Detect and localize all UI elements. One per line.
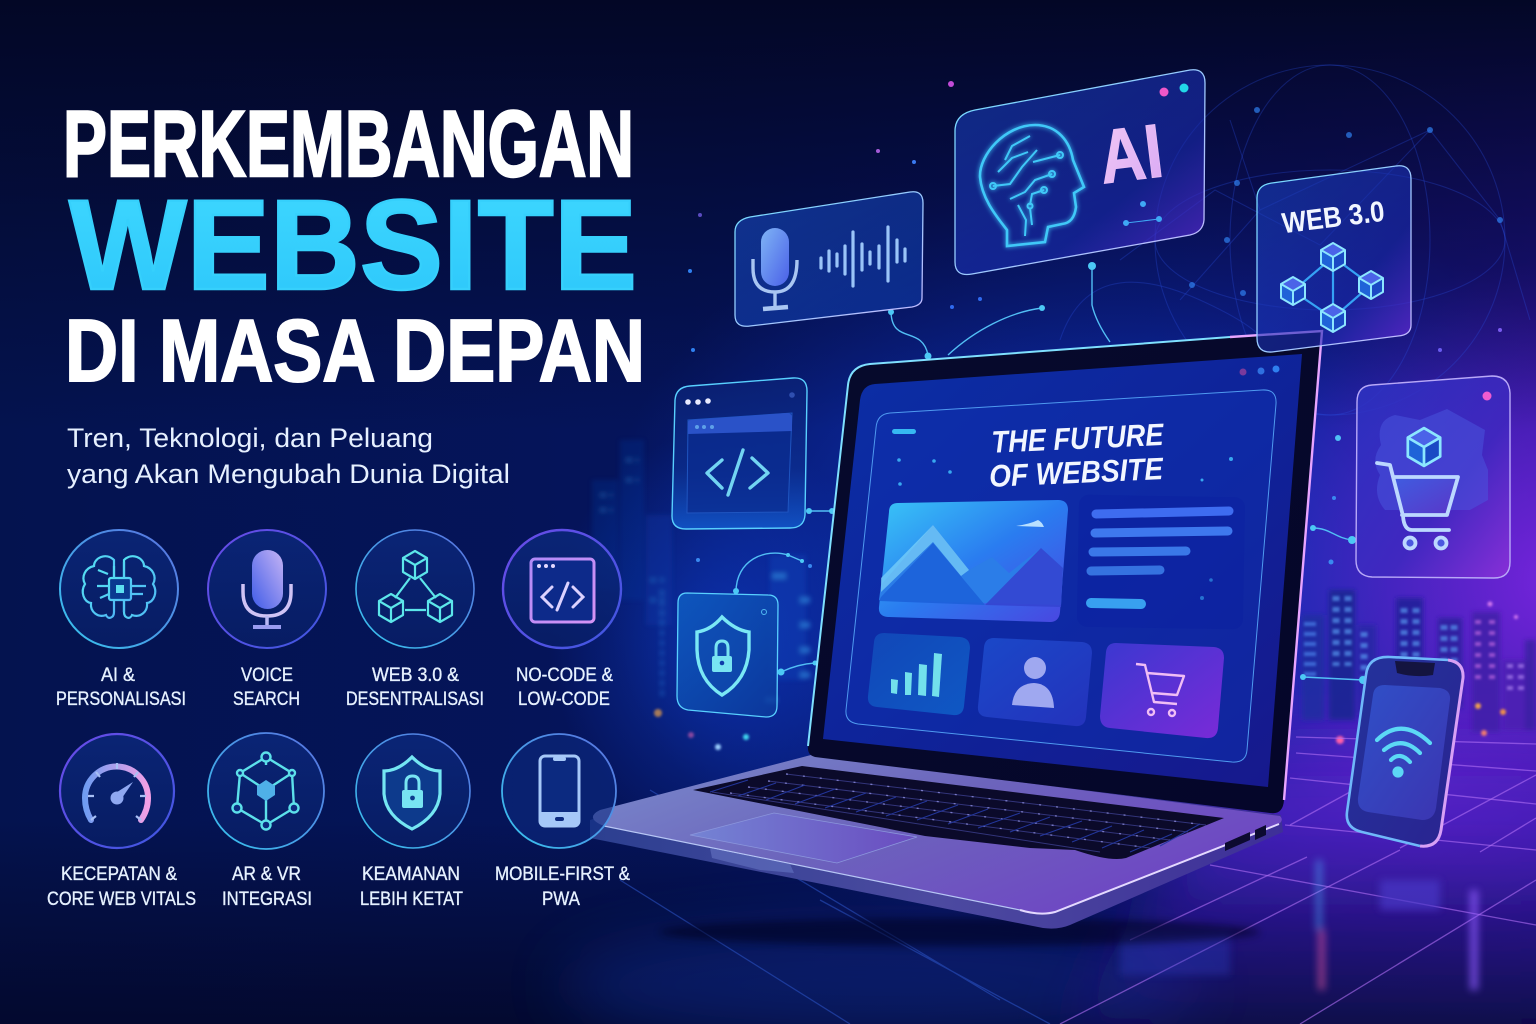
feature: speed bbox=[47, 734, 196, 910]
screen title: OF WEBSITE bbox=[988, 451, 1165, 494]
city lights left bbox=[654, 709, 749, 750]
feature: AR VR bbox=[208, 733, 324, 910]
subtitle: Tren, Teknologi, dan Peluang bbox=[67, 423, 433, 453]
label: VOICE bbox=[241, 665, 293, 686]
feature: mobile-first bbox=[495, 734, 630, 910]
trackpad bbox=[690, 813, 917, 863]
mini network bbox=[1124, 202, 1162, 226]
label: KECEPATAN & bbox=[61, 864, 177, 885]
city skyline right bbox=[1302, 590, 1536, 744]
label: WEB 3.0 & bbox=[372, 665, 459, 686]
title bbox=[63, 91, 645, 400]
feature: security: LEBIH KETAT bbox=[360, 889, 463, 910]
subtitle bbox=[67, 423, 510, 489]
icon: wifi bbox=[1377, 729, 1430, 776]
icon: wire cube bbox=[232, 752, 298, 830]
panel: web 3.0 bbox=[1257, 166, 1411, 352]
feature: no-code bbox=[503, 530, 621, 710]
icon: gauge bbox=[85, 763, 148, 820]
screen title: THE FUTURE bbox=[991, 417, 1165, 460]
feature: speed: CORE WEB VITALS bbox=[47, 889, 196, 910]
feature: web 3.0: DESENTRALISASI bbox=[346, 689, 484, 710]
panel: shop bbox=[1356, 376, 1510, 578]
hex cloud backdrop bbox=[1375, 409, 1488, 510]
screen title bbox=[987, 417, 1167, 494]
sound wave bbox=[821, 227, 905, 286]
phone bbox=[1347, 657, 1463, 846]
feature: security bbox=[356, 734, 470, 910]
icon: brain chip bbox=[83, 556, 155, 618]
label: AR & VR bbox=[232, 864, 301, 885]
code window bbox=[687, 413, 792, 513]
feature: no-code: LOW-CODE bbox=[518, 689, 610, 710]
feature: AR VR: INTEGRASI bbox=[222, 889, 312, 910]
AI label: AI bbox=[1094, 108, 1167, 201]
feature: AI bbox=[56, 530, 186, 710]
label: NO-CODE & bbox=[516, 665, 613, 686]
stats card bbox=[868, 633, 970, 715]
window dots bbox=[685, 392, 795, 405]
laptop base shadow bbox=[660, 918, 1260, 946]
feature: web 3.0 bbox=[346, 530, 484, 710]
menu bar bbox=[892, 429, 916, 434]
icon: microphone bbox=[243, 550, 291, 629]
panel: security bbox=[677, 593, 778, 717]
feature: AI: PERSONALISASI bbox=[56, 689, 186, 710]
subtitle: yang Akan Mengubah Dunia Digital bbox=[67, 459, 510, 489]
icon: brain head bbox=[980, 125, 1084, 246]
label: MOBILE-FIRST & bbox=[495, 864, 630, 885]
keyboard deck bbox=[593, 755, 1282, 914]
laptop base bbox=[590, 755, 1283, 929]
screen dots bbox=[1240, 366, 1280, 376]
screen text lines bbox=[1077, 495, 1245, 629]
screen inner frame bbox=[846, 390, 1276, 762]
connector lines bbox=[733, 262, 1367, 684]
ports bbox=[1225, 825, 1266, 851]
label: KEAMANAN bbox=[362, 864, 460, 885]
title: WEBSITE bbox=[69, 174, 637, 317]
laptop screen bbox=[823, 354, 1302, 787]
feature: voice search: SEARCH bbox=[233, 689, 300, 710]
panel: code bbox=[672, 378, 807, 529]
laptop lid bbox=[808, 331, 1322, 813]
window dots bbox=[1160, 84, 1188, 96]
panel heading: WEB 3.0 bbox=[1280, 196, 1386, 240]
person card bbox=[978, 638, 1092, 726]
panel: AI bbox=[955, 70, 1205, 274]
icon: shopping cart bbox=[1377, 463, 1458, 548]
title: PERKEMBANGAN bbox=[63, 91, 634, 196]
phone screen bbox=[1358, 685, 1450, 820]
title: DI MASA DEPAN bbox=[65, 301, 645, 400]
phone notch bbox=[1395, 661, 1435, 676]
keyboard bbox=[693, 766, 1224, 859]
icon: cube network bbox=[1281, 243, 1383, 332]
icon: microphone bbox=[753, 228, 797, 309]
city skyline left bbox=[592, 440, 810, 700]
feature: voice search bbox=[208, 530, 326, 710]
label: AI & bbox=[101, 665, 135, 686]
icon: phone bbox=[540, 756, 579, 826]
cart card bbox=[1100, 643, 1224, 738]
icon: box bbox=[1408, 428, 1440, 466]
icon: code window bbox=[531, 559, 594, 622]
icon: shield bbox=[697, 617, 749, 695]
icon: shield lock bbox=[384, 757, 440, 829]
screen particles bbox=[897, 457, 1233, 600]
feature: mobile-first: PWA bbox=[542, 889, 580, 910]
floor reflections bbox=[1120, 860, 1478, 990]
floor right bbox=[1050, 735, 1536, 1024]
icon: cubes bbox=[379, 551, 452, 622]
laptop bbox=[590, 331, 1322, 946]
floor grid bbox=[620, 737, 1536, 1024]
panel: voice bbox=[735, 192, 923, 326]
screen image card bbox=[879, 500, 1068, 622]
globe network backdrop bbox=[1060, 65, 1530, 415]
particles bbox=[688, 81, 1502, 568]
